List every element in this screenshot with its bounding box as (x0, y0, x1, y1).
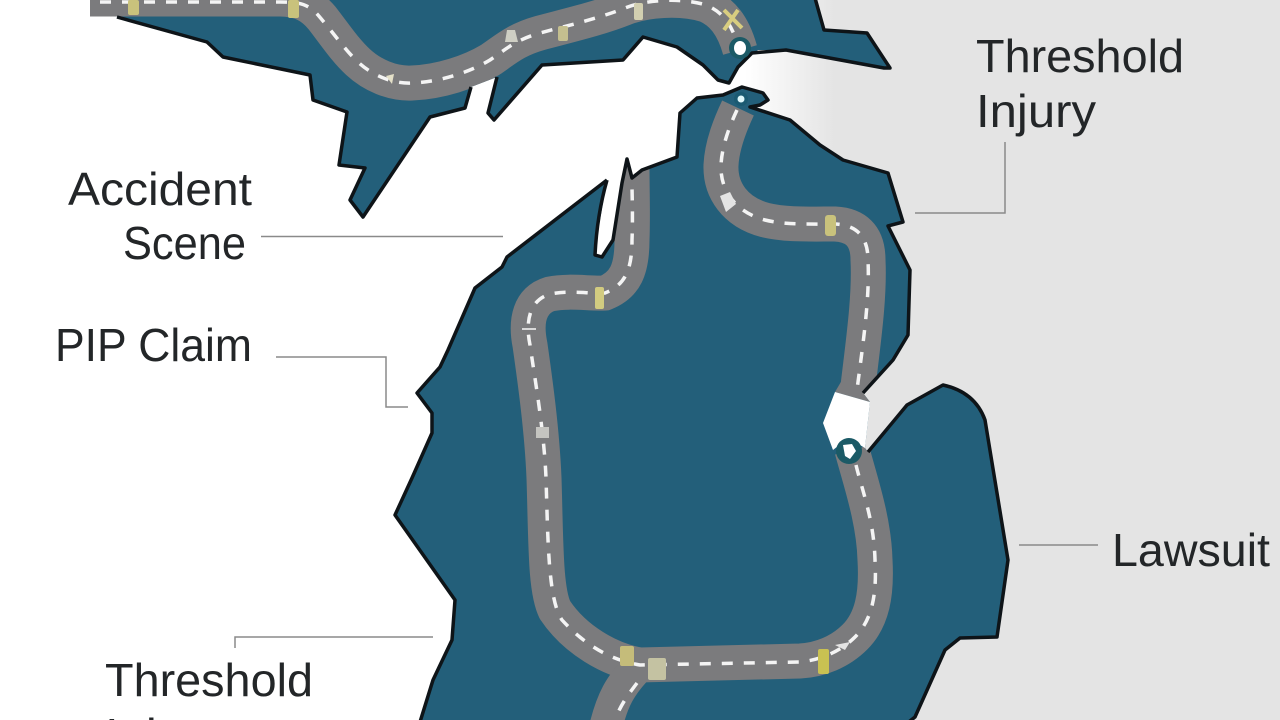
road: lower peninsula (528, 108, 880, 720)
leader line: PIP Claim (276, 357, 408, 407)
label: Lawsuit: Lawsuit (1112, 524, 1270, 576)
background: white to light gray (745, 0, 1280, 720)
coastline: lower peninsula (395, 87, 1008, 720)
map: lower peninsula (395, 87, 1008, 720)
map: upper peninsula (80, 0, 890, 217)
label: Accident Scene: Accident (68, 163, 252, 215)
leader line: Threshold Injury (top right) (915, 142, 1005, 213)
label: Accident Scene: Scene (123, 217, 246, 269)
icons: road markers, upper peninsula (128, 0, 742, 84)
marker: lower peninsula top dot (734, 92, 748, 106)
label: Accident Scene (68, 163, 252, 269)
road: upper peninsula (80, 0, 740, 83)
callout: white road break patch (823, 392, 870, 450)
leader line: Accident Scene (261, 236, 503, 238)
marker: lawsuit junction (836, 438, 862, 464)
marker: upper peninsula endpoint (729, 37, 751, 59)
label: Threshold Injury (top right) (976, 30, 1184, 137)
label: Threshold Injury (bottom left): Threshold (105, 654, 313, 706)
coastline: upper peninsula (117, 0, 890, 217)
icons: road markers, lower peninsula (522, 192, 850, 680)
label: PIP Claim: PIP Claim (55, 319, 252, 371)
leader line: Lawsuit (1019, 544, 1098, 546)
leader line: Threshold Injury (bottom left) (235, 637, 433, 648)
label: Threshold Injury (top right): Threshold (976, 30, 1184, 82)
label: Threshold Injury (top right): Injury (976, 85, 1096, 137)
